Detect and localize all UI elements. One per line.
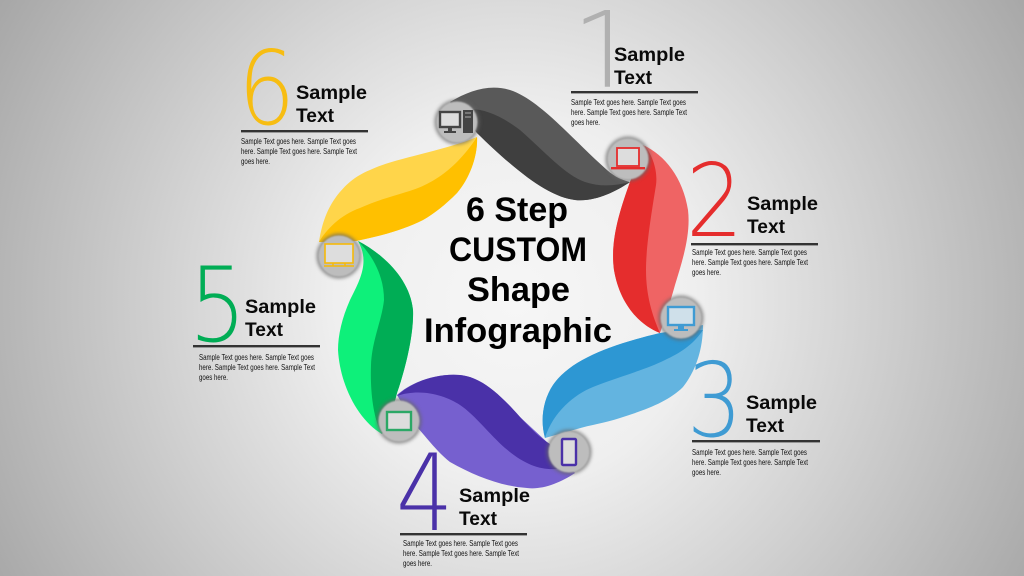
panel: step 1 xyxy=(571,0,698,127)
panel: step 4 xyxy=(396,433,530,568)
body text 6: here. Sample Text goes here. Sample Text xyxy=(241,146,357,156)
heading 4: Sample xyxy=(459,486,530,507)
body text 4: here. Sample Text goes here. Sample Text xyxy=(403,548,519,558)
body text 3: Sample Text goes here. Sample Text goes xyxy=(692,447,807,457)
heading 3 xyxy=(746,393,817,437)
heading 2: Sample xyxy=(747,194,818,215)
body text 1 xyxy=(571,97,687,127)
title: 6 Step xyxy=(466,191,568,229)
heading 6 xyxy=(296,83,367,127)
title: Shape xyxy=(467,271,570,309)
heading 2: Text xyxy=(747,217,786,238)
title xyxy=(424,191,612,350)
numeral 2: 2 xyxy=(686,142,743,260)
body text 5: goes here. xyxy=(199,372,228,382)
numeral 4: 4 xyxy=(396,433,453,556)
ribbon ring xyxy=(319,88,703,488)
ribbon 3: blue xyxy=(543,325,703,438)
ribbon 6: yellow xyxy=(319,137,477,242)
panel: step 3 xyxy=(687,342,820,477)
body text 2: Sample Text goes here. Sample Text goes xyxy=(692,247,807,257)
heading 6: Text xyxy=(296,106,335,127)
title: CUSTOM xyxy=(449,231,587,269)
body text 4 xyxy=(403,538,519,568)
heading 3: Sample xyxy=(746,393,817,414)
title: Infographic xyxy=(424,312,612,350)
heading 1 xyxy=(614,45,685,89)
body text 6: Sample Text goes here. Sample Text goes xyxy=(241,136,356,146)
node 1: desktop tower icon xyxy=(434,100,480,144)
heading 5: Sample xyxy=(245,297,316,318)
ribbon 2: red xyxy=(613,145,689,333)
heading 2 xyxy=(747,194,818,238)
body text 3: here. Sample Text goes here. Sample Text xyxy=(692,457,808,467)
heading 1: Text xyxy=(614,68,653,89)
body text 3 xyxy=(692,447,808,477)
numeral 5: 5 xyxy=(189,245,246,366)
panel: step 6 xyxy=(238,28,368,166)
body text 6 xyxy=(241,136,357,166)
heading 3: Text xyxy=(746,416,785,437)
body text 5 xyxy=(199,352,315,382)
body text 1: here. Sample Text goes here. Sample Text xyxy=(571,107,687,117)
body text 3: goes here. xyxy=(692,467,721,477)
body text 5: Sample Text goes here. Sample Text goes xyxy=(199,352,314,362)
heading 4 xyxy=(459,486,530,530)
ribbon 5: green xyxy=(338,241,413,434)
heading 5: Text xyxy=(245,320,284,341)
numeral 3: 3 xyxy=(687,342,742,461)
body text 2: here. Sample Text goes here. Sample Text xyxy=(692,257,808,267)
heading 1: Sample xyxy=(614,45,685,66)
ribbon 1: dark xyxy=(450,88,630,200)
panel: step 2 xyxy=(686,142,818,277)
body text 5: here. Sample Text goes here. Sample Text xyxy=(199,362,315,372)
body text 2: goes here. xyxy=(692,267,721,277)
body text 4: goes here. xyxy=(403,558,432,568)
node 2: laptop icon xyxy=(606,136,650,182)
panel: step 5 xyxy=(189,245,320,382)
body text 6: goes here. xyxy=(241,156,270,166)
heading 5 xyxy=(245,297,316,341)
node 4: phone icon xyxy=(546,430,592,474)
body text 4: Sample Text goes here. Sample Text goes xyxy=(403,538,518,548)
node 5: tablet icon xyxy=(376,398,422,444)
body text 2 xyxy=(692,247,808,277)
heading 6: Sample xyxy=(296,83,367,104)
heading 4: Text xyxy=(459,509,498,530)
ribbon 4: purple xyxy=(397,375,575,488)
node 6: television icon xyxy=(316,234,362,278)
node 3: monitor icon xyxy=(658,296,704,340)
numeral 6: 6 xyxy=(238,28,295,148)
body text 1: goes here. xyxy=(571,117,600,127)
body text 1: Sample Text goes here. Sample Text goes xyxy=(571,97,686,107)
